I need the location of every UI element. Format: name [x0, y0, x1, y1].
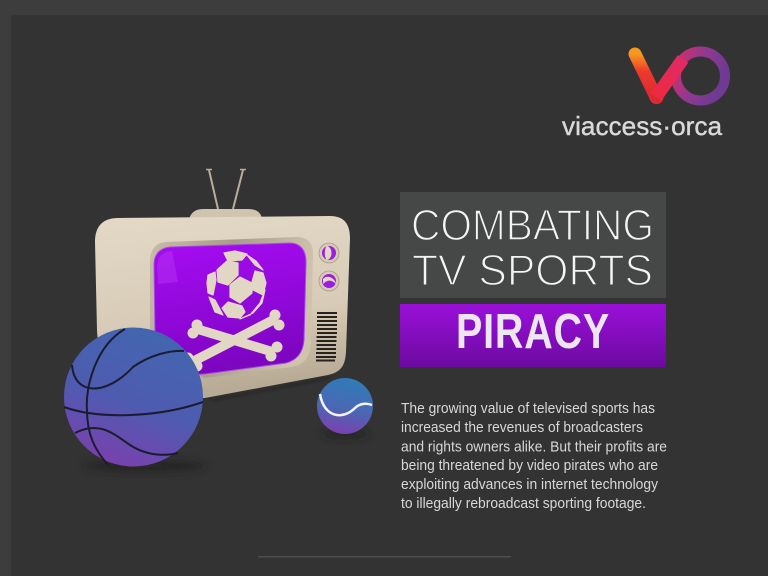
- icon: soccer ball: [207, 251, 266, 319]
- heading: combating tv sports: TV SPORTS: [412, 247, 653, 295]
- icon: tennis ball: [317, 378, 373, 434]
- TV shadow: [205, 375, 335, 402]
- illustration: retro TV with balls: [64, 170, 373, 472]
- icon: crossed bones: [182, 310, 284, 372]
- logo mark O: [676, 52, 725, 100]
- logo wordmark: viaccess·orca: [562, 111, 723, 141]
- heading: piracy: PIRACY: [456, 305, 610, 359]
- heading: combating tv sports: [411, 202, 654, 295]
- intro paragraph: increased the revenues of broadcasters: [401, 420, 643, 436]
- icon: basketball: [64, 328, 203, 466]
- TV top dome: [189, 209, 262, 219]
- logo mark V: [635, 54, 683, 98]
- intro paragraph: The growing value of televised sports has: [401, 401, 655, 417]
- intro paragraph: to illegally rebroadcast sporting footage.: [401, 496, 646, 512]
- TV body: [95, 216, 350, 398]
- title panel: [400, 192, 666, 298]
- tennis ball shadow: [321, 430, 369, 438]
- basketball shadow: [83, 460, 207, 472]
- icon: control knobs: [319, 243, 339, 291]
- title block: [400, 192, 666, 367]
- intro paragraph: and rights owners alike. But their profits are: [401, 440, 667, 456]
- piracy banner: [400, 304, 666, 367]
- icon: antennae: [206, 170, 246, 209]
- intro paragraph: being threatened by video pirates who are: [401, 458, 658, 474]
- heading: combating tv sports: COMBATING: [411, 202, 654, 250]
- TV screen bezel: [150, 237, 313, 378]
- intro paragraph: [401, 401, 667, 512]
- TV screen: [154, 243, 306, 374]
- logo: viaccess-orca: [562, 52, 725, 141]
- intro paragraph: exploiting advances in internet technology: [401, 477, 659, 493]
- icon: speaker grille: [316, 313, 337, 360]
